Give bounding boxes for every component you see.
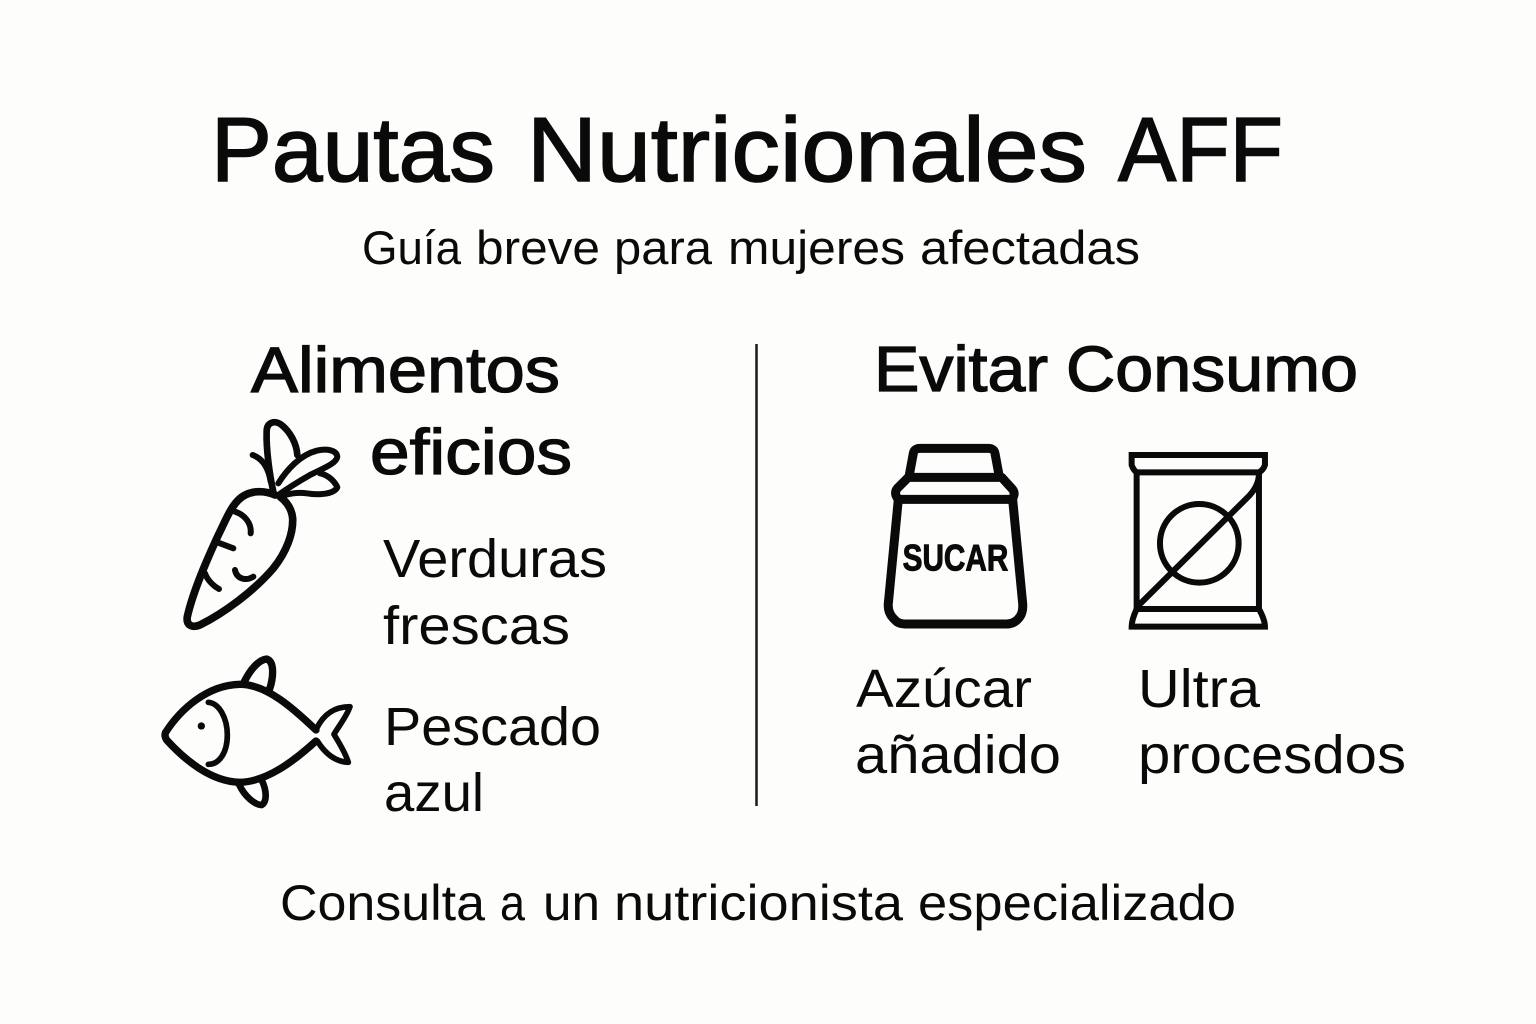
icon: sugar container	[888, 448, 1023, 624]
footer note: Consulta	[280, 875, 485, 931]
title: AFF	[1118, 100, 1283, 201]
subtitle: afectadas	[920, 221, 1140, 274]
heading: evitar consumo	[874, 333, 1358, 405]
label: ultra procesados: procesdos	[1138, 725, 1406, 785]
panel: evitar consumo	[855, 333, 1406, 785]
heading: alimentos beneficiosos	[251, 334, 572, 488]
title: Pautas	[211, 100, 495, 201]
label: verduras frescas: Verduras	[383, 529, 607, 589]
label: pescado azul: Pescado	[384, 697, 601, 757]
subtitle: para	[614, 221, 713, 274]
subtitle: Guía	[362, 221, 462, 274]
footer note: nutricionista	[614, 875, 903, 931]
label: azúcar añadido: Azúcar	[856, 659, 1032, 719]
label: verduras frescas: frescas	[383, 596, 570, 656]
divider	[755, 344, 758, 806]
icon: fish	[165, 659, 350, 805]
footer note: un	[543, 875, 600, 931]
panel: alimentos beneficiosos	[165, 334, 607, 823]
icon: carrot	[187, 422, 337, 626]
footer note	[280, 875, 1236, 931]
label: azúcar añadido	[855, 659, 1061, 785]
footer note: especializado	[918, 875, 1236, 931]
footer note: a	[500, 875, 525, 931]
icon: crossed-out ultra-processed package	[1132, 455, 1265, 627]
label: verduras frescas	[383, 529, 607, 656]
subtitle	[362, 221, 1140, 274]
icon: sugar container: SUCAR	[903, 538, 1008, 579]
label: pescado azul: azul	[384, 763, 484, 823]
heading: evitar consumo: Consumo	[1066, 333, 1358, 405]
label: pescado azul	[384, 697, 601, 823]
title	[211, 100, 1283, 201]
title: Nutricionales	[527, 100, 1087, 201]
heading: evitar consumo: Evitar	[874, 333, 1048, 405]
label: ultra procesados: Ultra	[1138, 659, 1261, 719]
label: ultra procesados	[1138, 659, 1406, 785]
subtitle: breve	[476, 221, 600, 274]
label: azúcar añadido: añadido	[855, 725, 1061, 785]
heading: alimentos beneficiosos: Alimentos	[251, 334, 560, 406]
subtitle: mujeres	[728, 221, 905, 274]
heading: alimentos beneficiosos: eficios	[370, 416, 572, 488]
